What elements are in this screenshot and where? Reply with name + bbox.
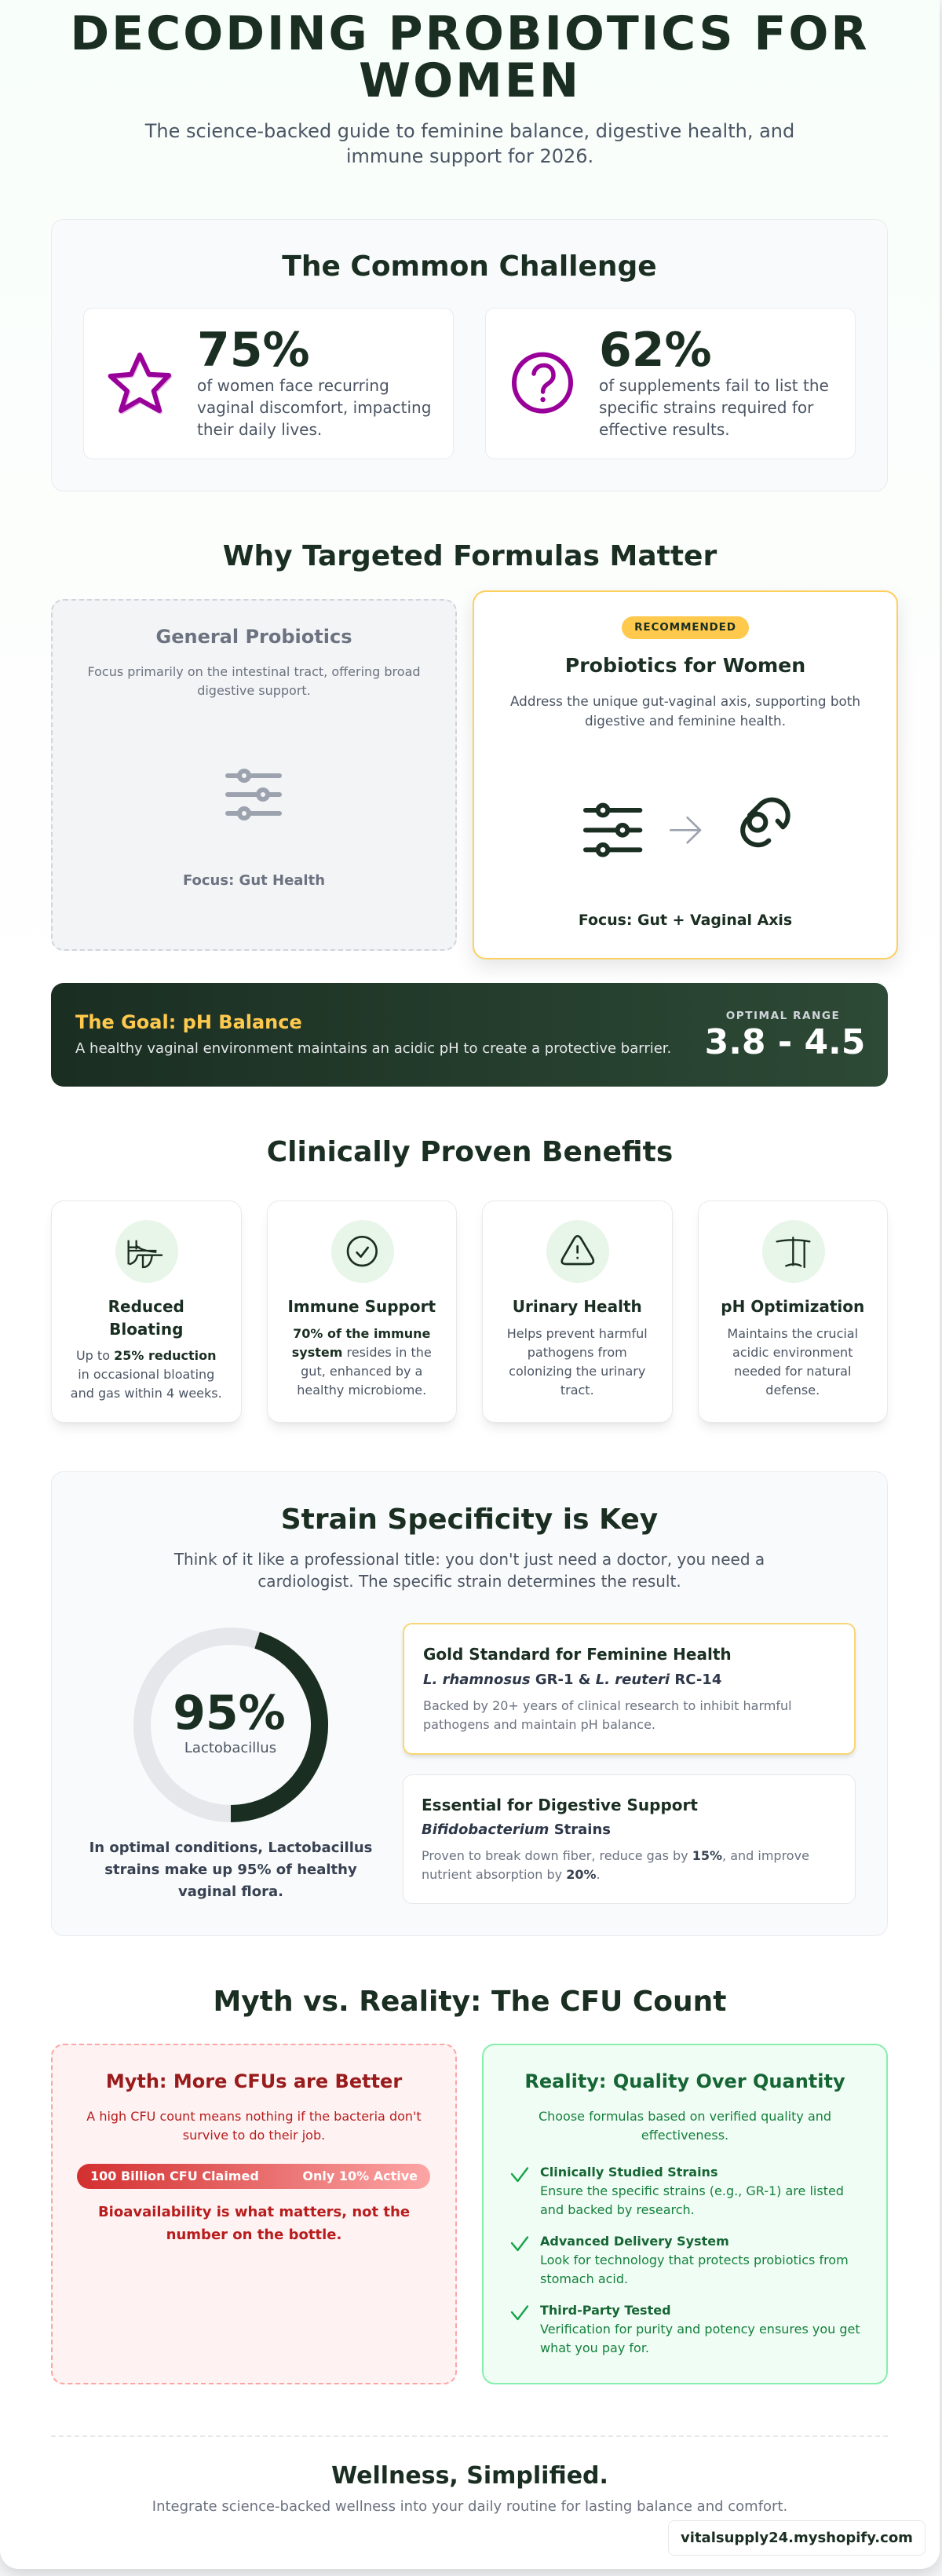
card: pH optimization — [697, 1200, 888, 1423]
panel: reality — [482, 2044, 888, 2384]
myth text — [86, 2109, 422, 2143]
benefit text: healthy microbiome. — [297, 1382, 426, 1398]
card text: Address the unique gut-vaginal axis, supporting both — [510, 692, 860, 708]
strain name: Bifidobacterium Strains — [422, 1821, 611, 1837]
benefit text: in occasional bloating — [78, 1366, 214, 1382]
strain card title: Gold Standard for Feminine Health — [423, 1645, 732, 1664]
stat description — [599, 376, 829, 439]
panel: myth — [51, 2044, 457, 2384]
card text: digestive support. — [197, 683, 311, 698]
myth conclusion — [98, 2204, 410, 2242]
icon: bloating — [115, 1220, 178, 1283]
benefit text: colonizing the urinary — [509, 1363, 645, 1379]
donut caption: strains make up 95% of healthy — [104, 1862, 357, 1878]
optimal range label: OPTIMAL RANGE — [726, 1010, 840, 1022]
strain card title: Essential for Digestive Support — [422, 1796, 698, 1814]
icon: check circle — [331, 1220, 394, 1283]
title: DECODING PROBIOTICS FOR — [70, 6, 870, 61]
intro text: cardiologist. The specific strain determines the result. — [257, 1572, 681, 1591]
donut label: Lactobacillus — [184, 1740, 276, 1756]
benefit text: and gas within 4 weeks. — [71, 1385, 222, 1401]
heading: the common challenge: The Common Challenge — [282, 250, 657, 283]
card: urinary health — [482, 1200, 672, 1423]
strain text: nutrient absorption by 20%. — [422, 1867, 601, 1882]
footer text: Integrate science-backed wellness into your daily routine for lasting balance and comfort. — [152, 2498, 787, 2515]
benefit text — [292, 1325, 432, 1398]
item text: Third-Party Tested — [540, 2303, 671, 2318]
icon: check — [510, 2236, 529, 2252]
stat card: 75% — [83, 308, 454, 459]
banner: pH balance — [51, 983, 888, 1087]
badge: recommended — [622, 616, 749, 639]
benefit text: defense. — [765, 1382, 820, 1398]
item text: Ensure the specific strains (e.g., GR-1) are listed — [540, 2183, 844, 2198]
stat description: specific strains required for — [599, 398, 813, 417]
benefit text — [727, 1325, 858, 1398]
strain text: Backed by 20+ years of clinical research to inhibit harmful — [423, 1698, 792, 1713]
footer heading: Wellness, Simplified. — [331, 2462, 608, 2489]
icon: warning triangle — [546, 1220, 609, 1283]
icon: sliders — [225, 769, 282, 820]
benefit text: Maintains the crucial — [727, 1325, 858, 1341]
panel: general probiotics — [51, 599, 457, 951]
panel: probiotics for women — [469, 590, 902, 971]
intro text — [174, 1550, 765, 1591]
list item: advanced delivery system — [510, 2234, 849, 2286]
badge: website: vitalsupply24.myshopify.com — [681, 2530, 913, 2546]
icon: star — [108, 353, 172, 415]
myth title: Myth: More CFUs are Better — [106, 2070, 402, 2092]
heading: strain specificity is key: Strain Specificity is Key — [281, 1504, 658, 1536]
stat description: their daily lives. — [197, 420, 322, 439]
icon: check — [510, 2305, 529, 2321]
reality text: effectiveness. — [641, 2128, 728, 2143]
title: WOMEN — [359, 53, 581, 108]
benefit text: 70% of the immune — [293, 1325, 430, 1341]
strain text — [422, 1848, 809, 1882]
item text: what you pay for. — [540, 2340, 649, 2355]
card title: Probiotics for Women — [565, 654, 805, 677]
card: immune support — [267, 1200, 457, 1423]
item text: Verification for purity and potency ensures you get — [540, 2322, 860, 2337]
card text: digestive and feminine health. — [585, 713, 786, 729]
banner text: A healthy vaginal environment maintains an acidic pH to create a protective barrier. — [75, 1040, 671, 1057]
benefit title: pH Optimization — [721, 1297, 864, 1316]
panel: the common challenge — [51, 219, 888, 491]
subtitle — [144, 119, 794, 166]
focus label: Focus: Gut + Vaginal Axis — [579, 911, 792, 928]
myth text: A high CFU count means nothing if the bacteria don't — [86, 2109, 422, 2124]
benefit title: Urinary Health — [513, 1297, 642, 1316]
bar label left: 100 Billion CFU Claimed — [90, 2169, 259, 2183]
heading: myth vs reality: Myth vs. Reality: The CFU Count — [213, 1986, 727, 2018]
item text: and backed by research. — [540, 2202, 695, 2217]
benefit title: Bloating — [109, 1320, 183, 1339]
reality title: Reality: Quality Over Quantity — [524, 2070, 845, 2092]
benefit text: needed for natural — [734, 1363, 851, 1379]
focus label: Focus: Gut Health — [183, 872, 325, 889]
donut caption: In optimal conditions, Lactobacillus — [89, 1840, 372, 1856]
myth conclusion: number on the bottle. — [166, 2227, 341, 2242]
stat number: 75% — [197, 323, 310, 378]
banner title: The Goal: pH Balance — [75, 1011, 302, 1033]
donut caption: vaginal flora. — [178, 1884, 283, 1900]
badge: recommended: RECOMMENDED — [634, 620, 736, 633]
item text — [540, 2165, 844, 2217]
strain card: gold standard — [402, 1623, 856, 1759]
badge: website — [668, 2520, 926, 2556]
heading: clinically proven benefits: Clinically Proven Benefits — [267, 1136, 673, 1168]
strain text — [423, 1698, 792, 1732]
icon: question mark — [512, 352, 573, 414]
title — [70, 6, 870, 108]
strain name: L. rhamnosus GR-1 & L. reuteri RC-14 — [423, 1672, 721, 1688]
benefit text: system resides in the — [292, 1344, 432, 1360]
donut chart: 95% lactobacillus — [133, 1628, 328, 1822]
donut caption — [89, 1840, 372, 1900]
reality text — [539, 2109, 831, 2143]
stat card: 62% — [485, 308, 856, 459]
card text — [87, 664, 421, 698]
intro text: Think of it like a professional title: you don't just need a doctor, you need a — [174, 1550, 765, 1569]
benefit text: tract. — [560, 1382, 594, 1398]
strain text: pathogens and maintain pH balance. — [423, 1717, 655, 1732]
bar: claimed vs active — [77, 2164, 430, 2189]
card text — [510, 692, 860, 729]
benefit text: gut, enhanced by a — [301, 1363, 422, 1379]
optimal range value: 3.8 - 4.5 — [705, 1022, 865, 1062]
reality text: Choose formulas based on verified quality and — [539, 2109, 831, 2124]
benefit text — [71, 1347, 222, 1401]
item text: stomach acid. — [540, 2271, 628, 2286]
panel: strain specificity — [51, 1471, 888, 1936]
benefit title: Immune Support — [287, 1297, 436, 1316]
card text: Focus primarily on the intestinal tract, offering broad — [87, 664, 421, 679]
card title: General Probiotics — [155, 626, 352, 648]
item text: Advanced Delivery System — [540, 2234, 729, 2249]
strain text: Proven to break down fiber, reduce gas by 15%, and improve — [422, 1848, 809, 1863]
benefit text — [507, 1325, 648, 1398]
subtitle: immune support for 2026. — [346, 144, 593, 166]
list item: third-party tested — [510, 2303, 860, 2355]
benefit title: Reduced — [108, 1297, 184, 1316]
myth text: survive to do their job. — [183, 2128, 325, 2143]
stat number: 62% — [599, 323, 712, 378]
stat description — [197, 376, 431, 439]
stat description: vaginal discomfort, impacting — [197, 398, 431, 417]
strain card: digestive support — [403, 1774, 856, 1904]
item text — [540, 2303, 860, 2355]
stat description: of supplements fail to list the — [599, 376, 829, 395]
heading: why targeted formulas matter: Why Targeted Formulas Matter — [223, 540, 717, 572]
bar label right: Only 10% Active — [302, 2169, 418, 2183]
item text: Look for technology that protects probiotics from — [540, 2253, 849, 2267]
icons: sliders, arrow, spiral — [583, 798, 790, 857]
item text — [540, 2234, 849, 2286]
card: reduced bloating — [51, 1200, 242, 1423]
donut value: 95% — [173, 1685, 286, 1740]
item text: Clinically Studied Strains — [540, 2165, 717, 2180]
subtitle: The science-backed guide to feminine balance, digestive health, and — [145, 119, 794, 141]
icon: check — [510, 2167, 529, 2183]
icon: balance — [762, 1220, 825, 1283]
list item: clinically studied strains — [510, 2165, 844, 2217]
benefit text: acidic environment — [732, 1344, 853, 1360]
stat description: of women face recurring — [197, 376, 389, 395]
stat description: effective results. — [599, 420, 730, 439]
benefit text: pathogens from — [528, 1344, 627, 1360]
benefit text: Helps prevent harmful — [507, 1325, 648, 1341]
benefit text: Up to 25% reduction — [76, 1347, 217, 1363]
myth conclusion: Bioavailability is what matters, not the — [98, 2204, 410, 2220]
benefit title — [108, 1297, 184, 1339]
